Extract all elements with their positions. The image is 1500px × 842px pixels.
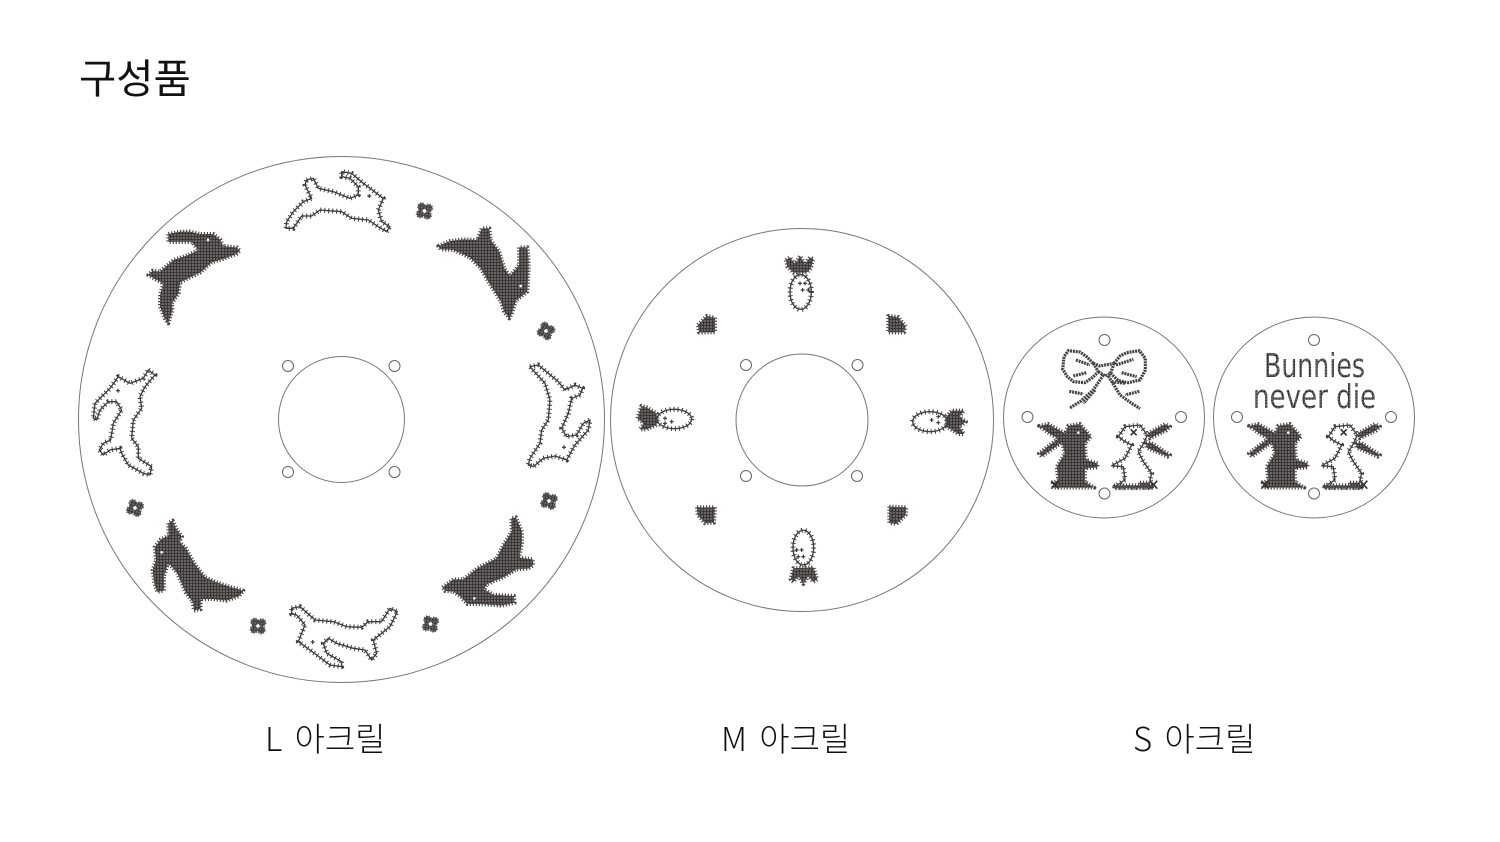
- bow: [1063, 351, 1145, 409]
- title: 구성품: [79, 46, 191, 105]
- outline bunny bottom: [292, 607, 397, 667]
- solid bunny bottom right: [443, 517, 533, 606]
- L disc outline: [78, 156, 604, 682]
- label: S acrylic: S 아크릴: [1133, 713, 1255, 761]
- stitched text line 1: Bunnies: [1264, 346, 1365, 385]
- outline bunny left: [93, 370, 155, 475]
- stitched text line 2: never die: [1253, 377, 1376, 416]
- outline bunny right: [528, 365, 590, 467]
- L disc centre hole: [278, 356, 404, 482]
- carrot left: [637, 406, 692, 429]
- label: L acrylic: L 아크릴: [265, 713, 386, 761]
- label: M acrylic: M 아크릴: [721, 713, 850, 761]
- panel: S acrylic disc with bow: [1004, 317, 1204, 518]
- small flowers: [126, 202, 558, 634]
- M disc outline: [610, 228, 994, 612]
- bunny ears: [1356, 424, 1380, 457]
- bunny mark: [1341, 429, 1367, 489]
- ground tufts: [1114, 483, 1150, 488]
- S disc outline: [1004, 317, 1204, 518]
- outline bunny: [1322, 425, 1363, 488]
- carrot bottom: [791, 530, 817, 584]
- bunny star: [1051, 481, 1059, 489]
- panel: L acrylic disc: [78, 156, 604, 682]
- bunny eye: [1077, 431, 1080, 434]
- bunny pair: [1039, 424, 1170, 489]
- S disc outline: [1214, 317, 1414, 518]
- solid bunny bottom left: [153, 521, 243, 611]
- bunny pair: [1249, 424, 1380, 489]
- M disc centre hole: [736, 354, 868, 486]
- S disc holes: [1022, 334, 1186, 499]
- L disc mounting holes: [282, 360, 400, 478]
- panel: S acrylic disc with text: [1214, 317, 1414, 518]
- ground tufts: [1324, 483, 1360, 488]
- outline bunny: [1112, 425, 1153, 488]
- M disc mounting holes: [740, 360, 863, 482]
- solid bunny top left: [148, 232, 240, 323]
- outline bunny top: [286, 172, 390, 232]
- solid bunny top right: [438, 228, 529, 318]
- carrot right: [913, 411, 966, 434]
- carrots and hearts: [637, 256, 966, 584]
- carrot top: [786, 256, 813, 309]
- hearts: [697, 316, 906, 524]
- bunny mark: [1131, 429, 1157, 489]
- solid bunny: [1039, 424, 1098, 488]
- bunny eye: [1287, 431, 1290, 434]
- bunny ears: [1146, 424, 1170, 457]
- panel: M acrylic disc: [610, 228, 994, 612]
- bunny star: [1261, 481, 1269, 489]
- solid bunny: [1249, 424, 1308, 488]
- S disc holes: [1232, 334, 1396, 499]
